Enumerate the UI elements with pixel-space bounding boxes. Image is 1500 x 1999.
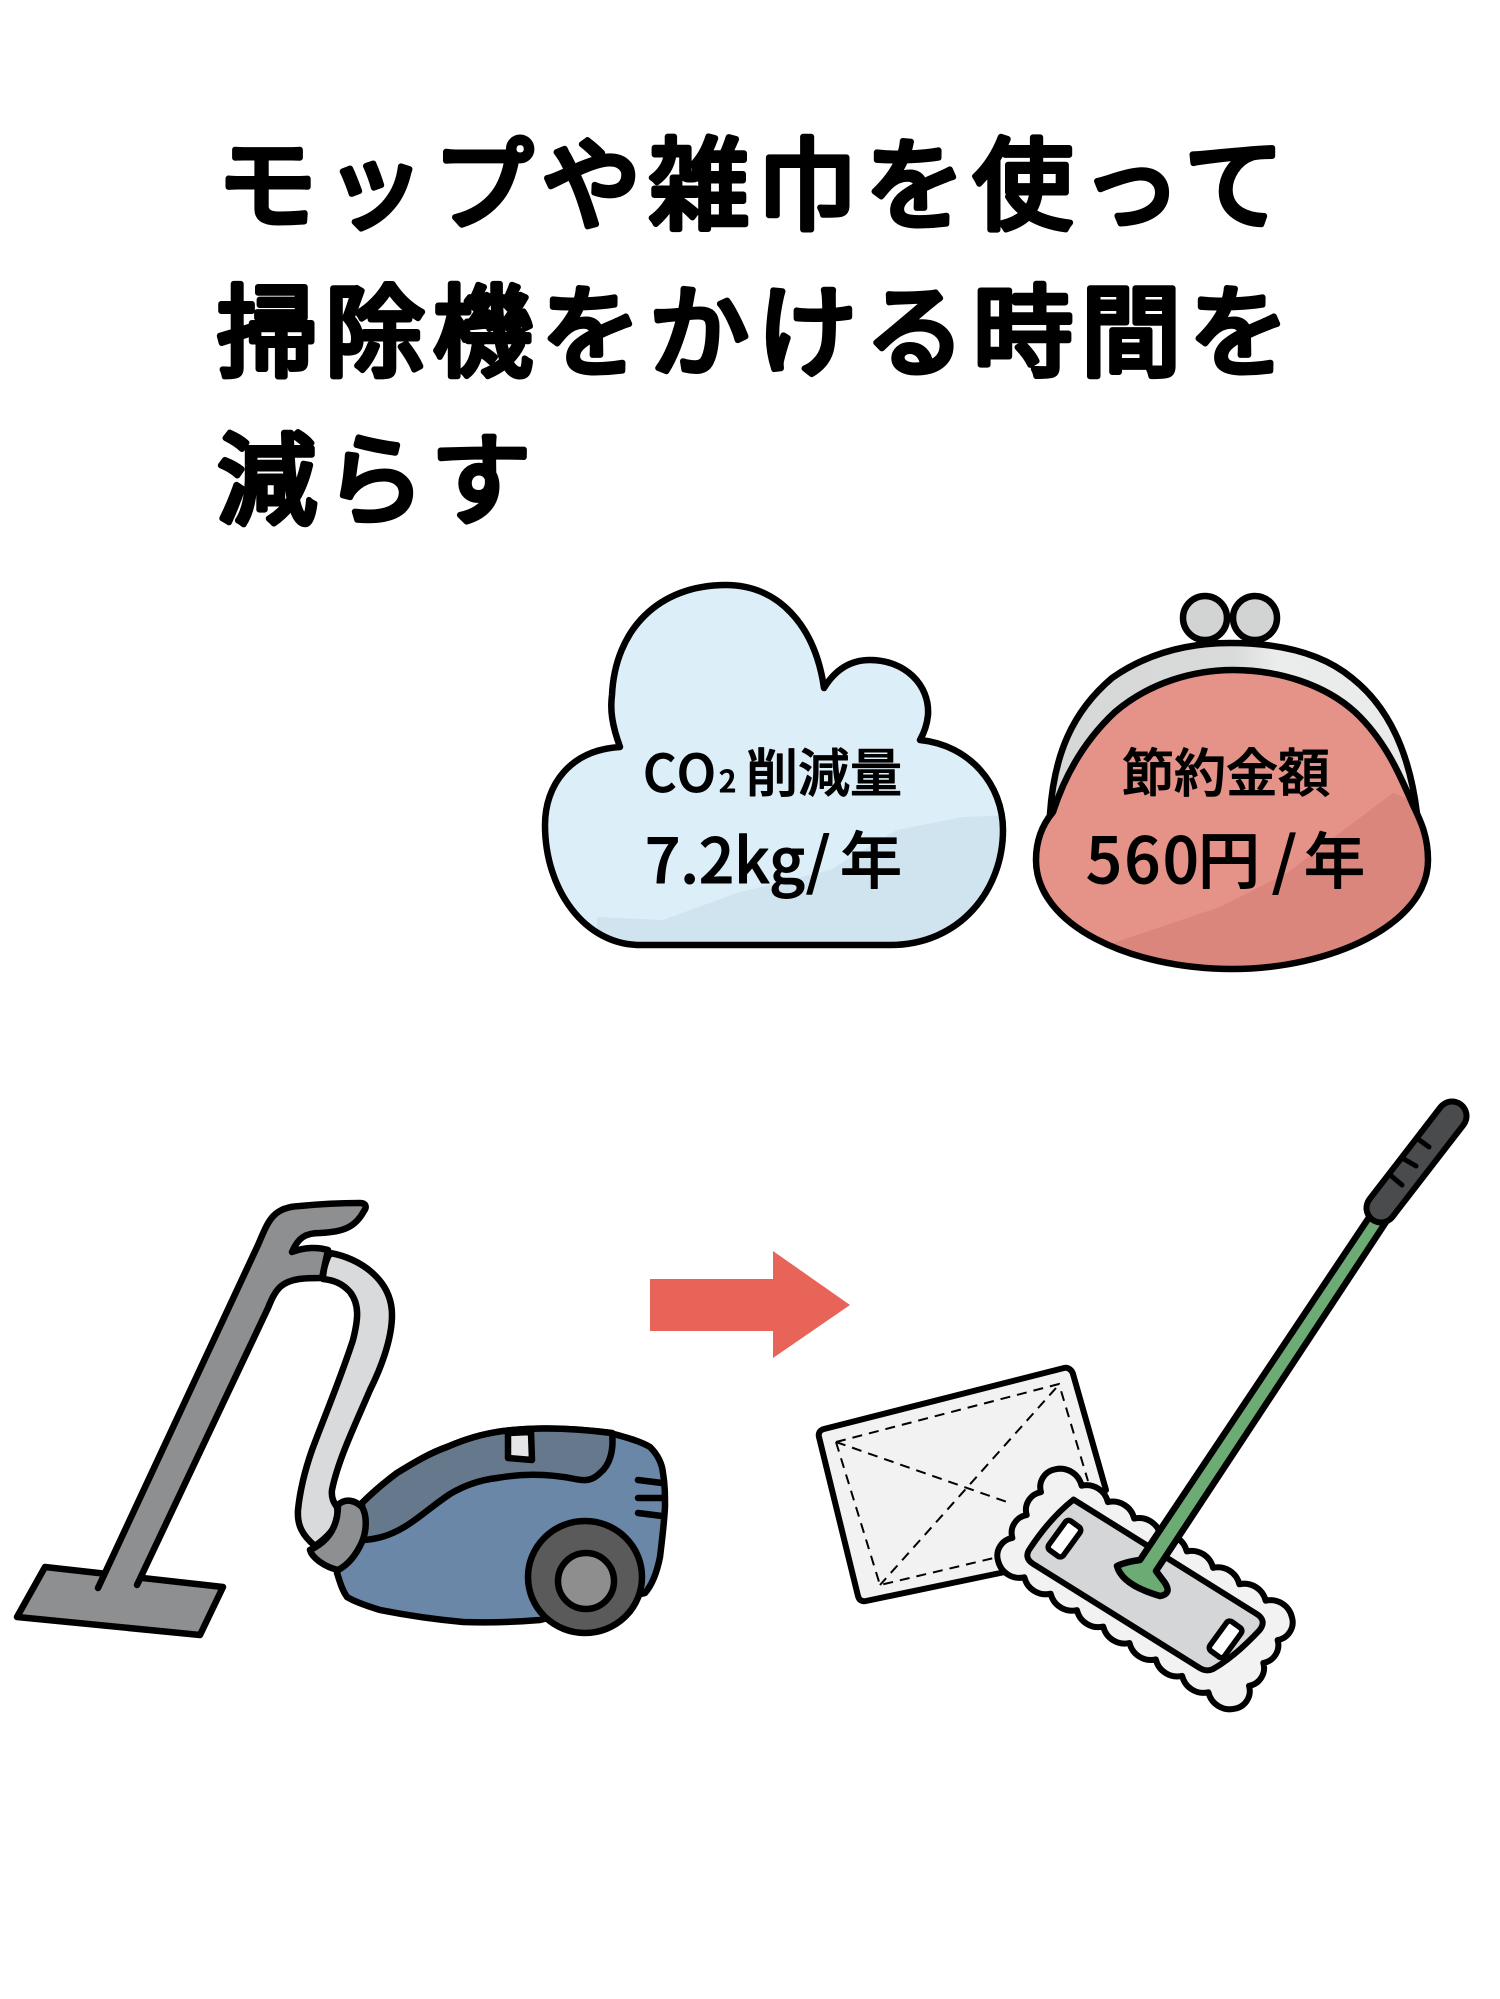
mop grip xyxy=(1381,1116,1452,1208)
icon: cloth xyxy=(819,1368,1106,1601)
wheel xyxy=(528,1521,642,1633)
savings value: 560 xyxy=(1086,811,1201,902)
hose cuff xyxy=(310,1501,366,1570)
purse body xyxy=(1036,670,1435,975)
purse clasp xyxy=(1183,596,1277,640)
floor nozzle xyxy=(17,1567,223,1635)
title: 減らす xyxy=(217,400,539,545)
savings value: / xyxy=(1272,811,1297,902)
wand pipe xyxy=(98,1203,366,1588)
savings value: 円 xyxy=(1198,811,1260,901)
handle slot xyxy=(508,1432,532,1460)
savings value: 年 xyxy=(1304,812,1365,901)
panel: CO2 cloud xyxy=(545,585,1015,950)
CO2 label: 2 xyxy=(719,757,736,801)
arrow xyxy=(650,1251,850,1358)
CO2 label: 削減量 xyxy=(746,732,902,807)
top band xyxy=(362,1429,612,1540)
panel: purse savings xyxy=(1036,596,1435,975)
vents xyxy=(638,1480,662,1516)
savings label: 節約金額 xyxy=(1122,732,1330,807)
hose xyxy=(298,1253,392,1546)
CO2 value: 年 xyxy=(840,811,902,901)
CO2 label: CO xyxy=(643,732,718,807)
CO2 value: 7.2kg xyxy=(645,811,805,901)
mop pad xyxy=(990,1461,1300,1717)
icon: vacuum cleaner xyxy=(17,1203,665,1635)
title: 掃除機をかける時間を xyxy=(217,252,1297,397)
icon: mop xyxy=(990,1116,1452,1717)
vacuum body xyxy=(337,1429,665,1622)
mop pole xyxy=(1117,1213,1386,1596)
CO2 value: / xyxy=(806,811,830,901)
title: モップや雑巾を使って xyxy=(217,105,1292,250)
purse frame xyxy=(1050,643,1417,814)
title xyxy=(217,105,1297,545)
